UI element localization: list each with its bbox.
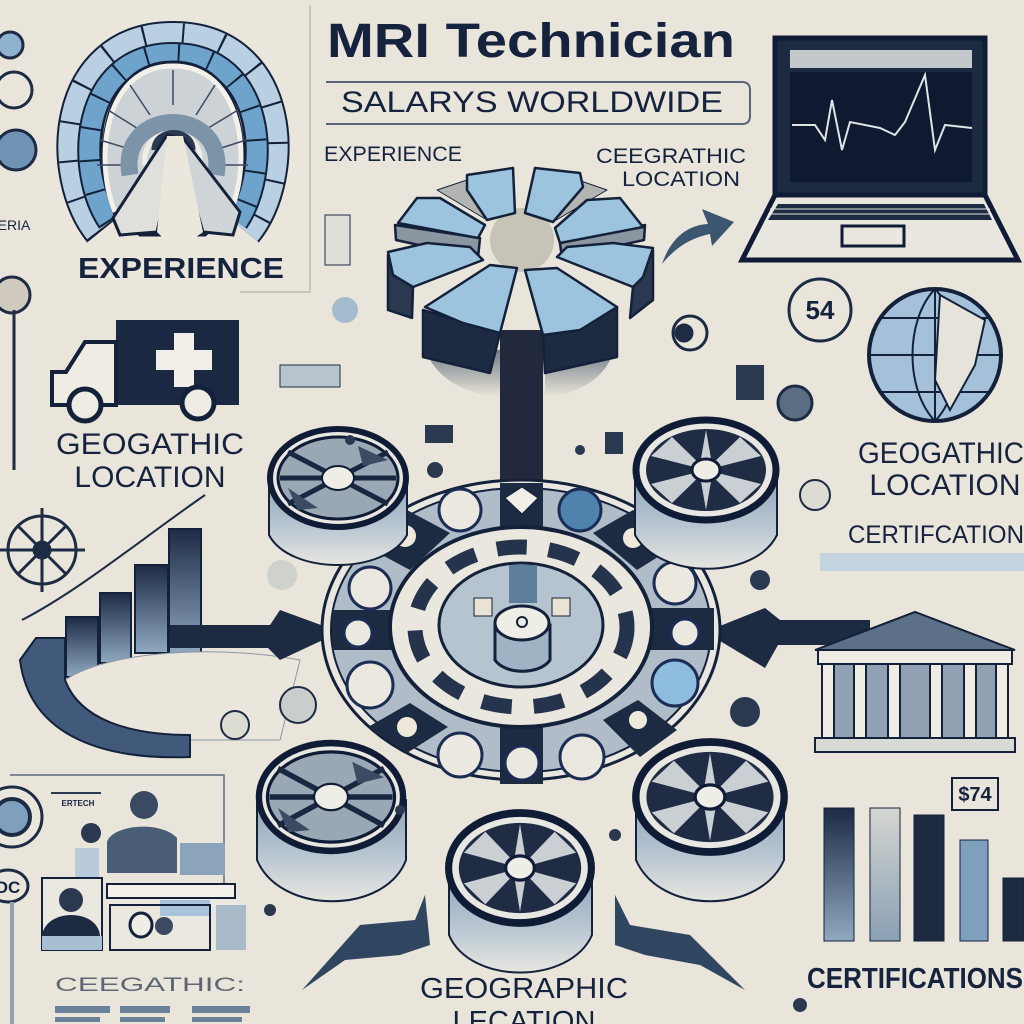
number badge: 54 bbox=[806, 295, 835, 325]
curved ramp arrow bbox=[20, 638, 300, 757]
small icons bbox=[221, 215, 830, 1012]
label: geographic location bottom: GEOGRAPHIC bbox=[420, 973, 628, 1005]
cylinder bottom centre bbox=[449, 813, 592, 972]
wheel: hub icons bbox=[344, 489, 699, 780]
label: geographic location left: LOCATION bbox=[74, 461, 226, 494]
laptop bbox=[742, 38, 1018, 260]
arrow: to laptop bbox=[662, 209, 734, 264]
segmented pie bbox=[388, 168, 653, 397]
cylinder bottom right bbox=[636, 742, 784, 901]
compass icon bbox=[0, 508, 85, 592]
arrow: left horizontal bbox=[170, 610, 340, 660]
building bbox=[815, 612, 1015, 752]
badge bottom right bbox=[952, 778, 998, 810]
cylinder top right bbox=[635, 420, 777, 569]
label: geographic location small bbox=[596, 145, 746, 191]
cylinder bottom left bbox=[257, 743, 406, 901]
label: geographic location right: LOCATION bbox=[869, 469, 1021, 502]
subtitle banner: SALARYS WORLDWIDE bbox=[341, 86, 723, 119]
bar chart bottom right bbox=[824, 808, 1024, 941]
arrow: bottom right bbox=[615, 895, 745, 990]
wheel: top diamond bbox=[505, 487, 538, 514]
label: geographic location left bbox=[56, 428, 244, 494]
label: geographic location small: CEEGRATHIC bbox=[596, 145, 746, 168]
panel: people bbox=[10, 775, 246, 950]
bar chart left bbox=[66, 529, 201, 677]
label: experience: EXPERIENCE bbox=[78, 253, 284, 285]
subtitle banner bbox=[326, 82, 750, 124]
wheel: centre machine bbox=[474, 565, 570, 671]
label: experience small: EXPERIENCE bbox=[324, 143, 462, 166]
left bottom icons bbox=[0, 787, 42, 1024]
label: geographic location left: GEOGATHIC bbox=[56, 428, 244, 461]
title: MRI Technician bbox=[327, 15, 735, 68]
globe bbox=[869, 289, 1001, 421]
truck bbox=[52, 320, 239, 421]
curve line bbox=[22, 495, 205, 620]
connector: vertical stem bbox=[500, 330, 543, 530]
wheel: inner ring bbox=[390, 527, 652, 727]
label: geographic location small: LOCATION bbox=[622, 168, 740, 191]
panel: people: ERTECH bbox=[62, 799, 95, 808]
banner strip bbox=[820, 553, 1024, 571]
wheel: starbursts bbox=[394, 525, 647, 737]
left edge icons bbox=[0, 32, 36, 470]
cylinder top left bbox=[269, 429, 407, 565]
arrow: right horizontal bbox=[705, 608, 870, 668]
label: geographic location bottom bbox=[420, 973, 628, 1024]
badge bottom right: $74 bbox=[958, 784, 993, 806]
small dial bbox=[673, 316, 812, 420]
arrow: bottom left bbox=[302, 895, 430, 990]
panel: MRI machine bbox=[40, 5, 310, 292]
label: geographic location right bbox=[858, 437, 1024, 502]
central wheel bbox=[322, 480, 720, 784]
number badge bbox=[789, 279, 851, 341]
footer text: CEEGATHIC: bbox=[55, 975, 245, 996]
footer bars bbox=[55, 1006, 250, 1022]
